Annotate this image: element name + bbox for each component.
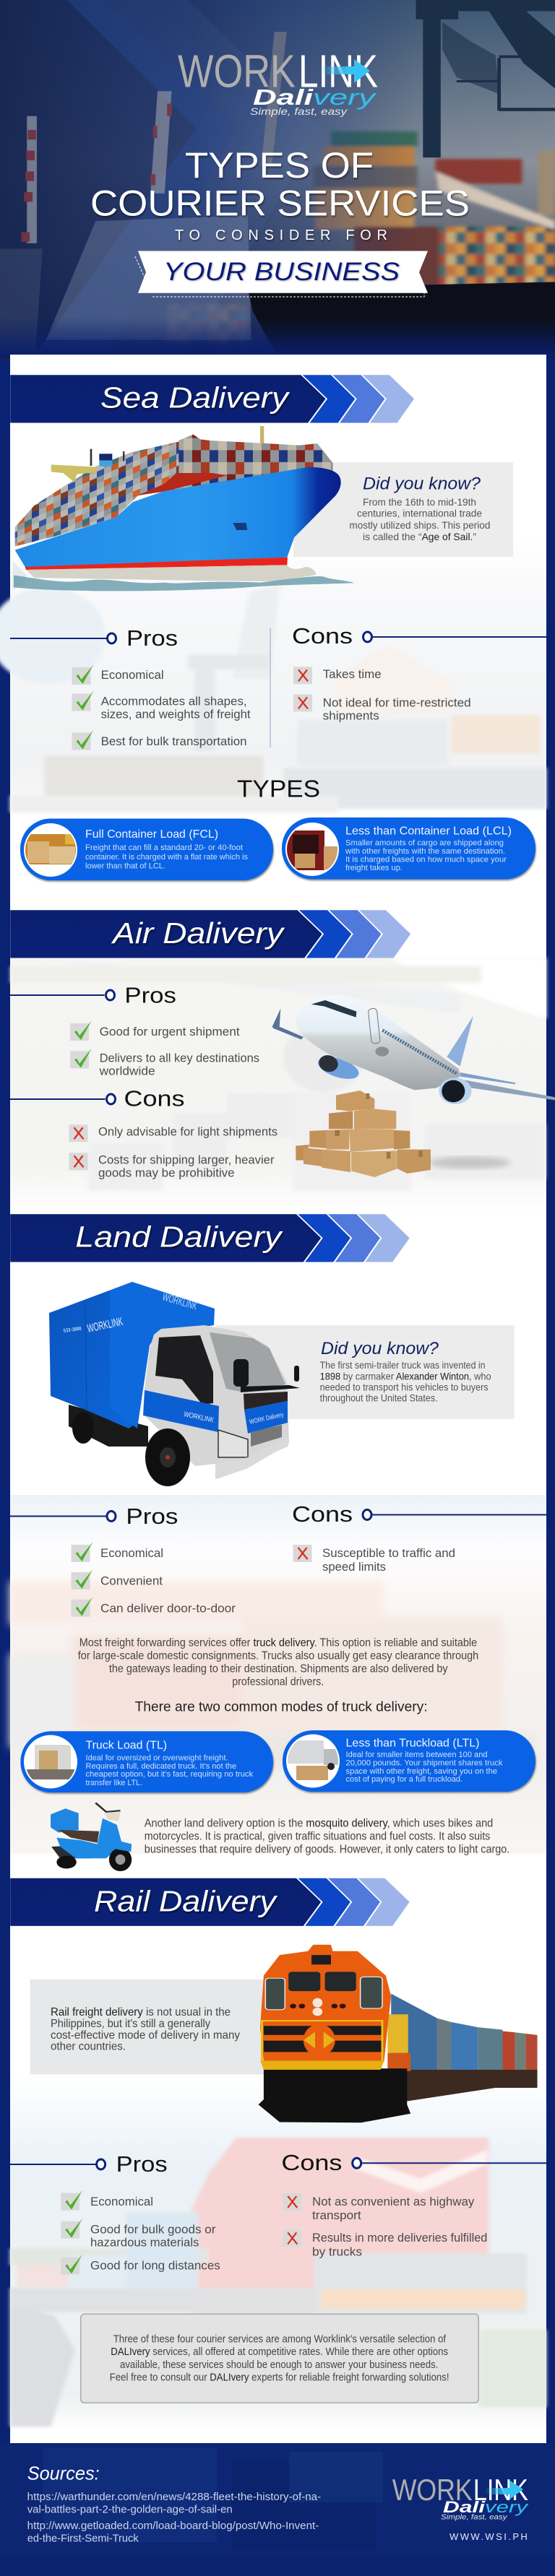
check icon [71,1597,92,1617]
rail pros list [61,2190,220,2274]
side walkway [387,2014,408,2053]
sources list: http://www.getloaded.com/load-board-blog/post/Who-Invent- [27,2520,319,2532]
title line 2: COURIER SERVICES [90,183,470,224]
logo arrow [485,2480,523,2499]
land section [10,1214,546,1871]
pill text: lower than that of LCL. [85,862,165,871]
pill text: cheapest option, but it's fast, requiring no truck [85,1770,254,1779]
front fender [111,1839,132,1852]
loco body [260,1945,391,2062]
sea pros heading [10,625,178,651]
connector [10,2164,96,2165]
callout text: available, these services should be enough to answer your business needs. [120,2359,438,2371]
truck delivery paragraph: professional drivers. [232,1675,324,1688]
air cons list [69,1124,278,1180]
water [14,576,355,591]
pill text: freight takes up. [345,864,403,872]
head lamp [218,1430,248,1457]
front logo: WORK Dalivery [249,1410,285,1426]
crane on deck [51,464,97,482]
windshield [210,1332,285,1392]
mirror [233,1359,300,1392]
box door edge [85,1304,87,1410]
pill title: Full Container Load (FCL) [85,828,218,841]
pill shape [283,1730,535,1792]
crane silhouettes [416,0,555,157]
pill text [345,838,507,872]
left engine [315,1052,361,1083]
check icon [71,1569,92,1590]
x icon [293,667,312,684]
delivery scooter [51,1803,132,1871]
logo word LINK: LINK [473,2473,528,2507]
ground shadow [429,1156,511,1169]
far wing [421,1075,555,1100]
logo word WORK: WORK [178,45,296,97]
lower frame [259,2068,410,2122]
logo tagline: Simple, fast, easy [250,105,348,117]
logo word Dali: Dali [443,2498,486,2516]
banner arrows [10,1878,410,1926]
front stripe [244,1401,288,1434]
item [312,2195,475,2222]
callout text: Feel free to consult our DALIvery experts for reliable freight forwarding solutions! [110,2372,449,2383]
sources list: ed-the-First-Semi-Truck [27,2533,139,2545]
pill text [85,844,248,871]
pill text: container. It is charged with a flat rate which is [85,853,248,862]
item: Best for bulk transportation [101,734,247,748]
box text: cost-effective mode of delivery in many [51,2029,240,2042]
website: WWW.WSI.PH [449,2531,528,2542]
check icon [72,729,94,750]
main title [90,145,470,243]
node [353,2158,361,2168]
body [56,1818,122,1858]
item: Accommodates all shapes, [101,694,247,708]
node [97,2159,106,2169]
land background photo [10,1495,546,1854]
railing [262,2021,382,2062]
chassis [69,1405,148,1447]
connector [10,638,106,639]
photo circle [24,823,77,877]
logo word LINK: LINK [298,45,378,97]
pill text [85,1753,254,1787]
item [90,2222,216,2249]
header [0,0,555,360]
check icon [72,691,94,711]
item: Results in more deliveries fulfilled [312,2231,487,2245]
faded port cranes [0,32,287,354]
item [99,1051,259,1077]
logo word Dali: Dali [253,84,314,110]
connector [10,1515,106,1517]
box text [51,2006,240,2052]
banner title: Air Dalivery [111,916,285,950]
door logo: WORKLINK [183,1410,215,1425]
ship hull [248,282,555,357]
banner title: Sea Dalivery [100,381,291,415]
label: Cons [292,623,353,649]
node [363,1509,371,1519]
pill text: It is charged based on how much space your [345,856,507,864]
item: hazardous materials [90,2236,199,2249]
pill text: cost of paying for a full truckload. [345,1775,462,1784]
item: Susceptible to traffic and [322,1546,455,1560]
phone number: 533-3888 [63,1327,82,1334]
sea background photo [0,538,546,816]
pill title: Less than Truckload (LTL) [345,1737,480,1749]
air background photo [10,958,546,1212]
box heading: Did you know? [363,474,481,494]
ribbon shape [138,251,428,293]
pill text: 20,000 pounds. Your shipment shares truck [345,1758,503,1767]
closing callout [81,2314,478,2403]
banner title: Land Dalivery [75,1220,283,1254]
blue chevrons [35,0,237,355]
rear wheel [72,1412,94,1444]
callout text: DALIvery services, all offered at competitive rates. While there are other options [111,2346,448,2358]
connector [10,1098,106,1100]
photo circle [24,1735,77,1788]
box heading: Did you know? [321,1339,439,1358]
freight train [259,1945,538,2122]
x icon [283,2229,301,2247]
item [98,1153,275,1180]
containers [15,441,184,547]
front wheel [145,1428,190,1486]
label: Cons [281,2150,342,2175]
rail cons heading [281,2150,547,2175]
red stripe [25,558,288,570]
air cons heading [10,1085,185,1111]
rail background photo [10,2074,546,2430]
air banner [10,910,410,958]
front grille [251,1425,282,1447]
item [312,2231,487,2259]
label: Pros [126,1504,178,1529]
right engine [439,1077,472,1104]
box text [349,496,490,542]
black stripes [264,2026,383,2035]
node [107,1094,116,1104]
node [107,1511,116,1521]
item [322,1546,455,1574]
photo circle [285,823,339,876]
white content panel [10,355,546,2443]
check icon [61,2219,82,2239]
item: goods may be prohibitive [98,1166,235,1180]
land cons list [293,1545,455,1574]
pill text: Requires a full, dedicated truck. It's not the [85,1762,236,1771]
banner title: Rail Dalivery [94,1884,278,1917]
item: sizes, and weights of freight [101,708,251,721]
check icon [70,1020,92,1041]
truck delivery paragraph: the gateways leading to their destination. Shipments are also delivered by [109,1662,448,1675]
truck delivery paragraph: Most freight forwarding services offer truck delivery. This option is reliable and suitable [79,1636,477,1649]
pill: truck load [20,1731,273,1792]
item: Not ideal for time-restricted [323,695,471,709]
cargo box side [49,1282,137,1428]
label: Cons [124,1085,185,1111]
funnel [90,449,124,467]
logo word very: very [313,84,378,110]
banner arrows [10,1214,410,1262]
item: Economical [90,2195,153,2208]
cockpit [311,1000,356,1018]
pill text: Ideal for oversized or overweight freight. [85,1753,228,1762]
title line 3: TO CONSIDER FOR [175,227,387,243]
cab windows [265,1972,382,2010]
box logo front: WORKLINK [161,1291,199,1312]
item: Economical [101,668,164,682]
cardboard boxes [296,1090,511,1177]
side window [155,1335,213,1405]
item: Costs for shipping larger, heavier [98,1153,275,1167]
top box [51,1808,79,1832]
logo arrow [320,59,370,83]
item: Good for long distances [90,2259,220,2272]
ribbon [135,251,428,297]
label: Cons [292,1501,353,1527]
air section [10,910,555,1212]
rail cons list [283,2193,487,2259]
x icon [293,694,312,711]
box text: Rail freight delivery is not usual in the [51,2006,231,2018]
item: Good for bulk goods or [90,2222,216,2236]
check icon [72,664,94,685]
sources list: val-battles-part-2-the-golden-age-of-sail-en [27,2504,233,2516]
seat [59,1830,99,1843]
callout text [110,2333,449,2383]
logo word very: very [485,2498,530,2516]
rail pros heading [10,2151,168,2177]
x icon [293,1545,312,1562]
box text: other countries. [51,2041,126,2052]
pill: less than truckload [283,1730,535,1792]
rail banner [10,1878,410,1926]
box text: mostly utilized ships. This period [349,519,490,531]
banner arrows [10,375,414,423]
land pros list [71,1542,236,1617]
box text: throughout the United States. [320,1392,438,1403]
pill text: Freight that can fill a standard 20- or 40-foot [85,844,243,852]
front wheel [109,1848,132,1871]
sources list [27,2491,321,2545]
box text: is called the “Age of Sail.” [363,531,476,542]
land cons heading [292,1501,546,1527]
rail intro box [30,1979,276,2074]
box background [30,1979,276,2074]
cab [145,1325,289,1479]
item: worldwide [99,1064,155,1077]
pill shape [20,819,273,880]
item: Good for urgent shipment [100,1025,240,1038]
label: Pros [126,625,178,651]
box text: From the 16th to mid-19th [363,496,476,508]
footer logo [392,2473,530,2542]
item: Takes time [323,667,382,681]
node [363,632,371,642]
truck delivery paragraph: for large-scale domestic consignments. Trucks also usually get easy clearance through [78,1649,478,1662]
airplane [272,994,555,1104]
rear wheel [56,1856,77,1868]
pill text: with other freights with the same destination. [345,847,505,856]
header background photo [0,0,555,360]
did you know box [293,462,513,557]
fuselage [296,994,460,1090]
pill shape [282,818,535,880]
check icon [61,2190,82,2211]
winglet and near wing [272,1009,304,1039]
mosquito delivery paragraph: Another land delivery option is the mosquito delivery, which uses bikes and [145,1817,493,1829]
emblem [304,2024,335,2056]
mosquito delivery paragraph [145,1817,509,1855]
item: Economical [100,1546,163,1560]
node [106,990,114,1000]
handlebar [95,1803,121,1812]
box logo side: WORKLINK [86,1316,124,1335]
truck delivery paragraph [78,1636,478,1688]
mosquito delivery paragraph: motorcycles. It is practical, given traffic situations and fuel costs. It also suits [145,1830,490,1843]
tail fin [447,1016,473,1067]
top vent [311,1955,331,1964]
box pile [296,1090,431,1177]
item: Convenient [100,1574,163,1587]
containers stack and port elements [166,131,555,343]
ribbon text: YOUR BUSINESS [163,258,400,286]
pill text: space with other freight, saving you on the [345,1767,497,1776]
container cars [391,1994,538,2070]
box text: needed to transport his vehicles to buyers [320,1381,489,1392]
pill text: transfer like LTL. [85,1779,142,1787]
ribbon dashes [135,256,424,297]
item: transport [312,2208,361,2222]
sea cons heading [292,623,547,649]
pill title: Truck Load (TL) [85,1739,167,1751]
logo [178,45,378,117]
water spray [12,561,27,590]
title line 1: TYPES OF [185,145,374,186]
x icon [69,1153,88,1170]
container ship [12,426,355,591]
callout box [81,2314,478,2403]
mosquito delivery paragraph: businesses that require delivery of goods. However, it only caters to light cargo. [145,1843,509,1855]
pill text [345,1751,503,1784]
bumper [215,1437,288,1479]
belly fairing [375,1046,389,1057]
passenger windows [382,1031,457,1074]
pill title: Less than Container Load (LCL) [345,825,512,837]
air pros heading [10,982,176,1008]
left dark overlay [0,0,457,360]
sources list: https://warthunder.com/en/news/4288-fleet-the-history-of-na- [27,2491,321,2503]
item: Only advisable for light shipments [98,1125,278,1139]
truck modes intro: There are two common modes of truck delivery: [135,1700,428,1715]
anchor mark [233,523,247,530]
sources heading: Sources: [27,2462,100,2484]
rail section [10,1878,547,2430]
label: Pros [124,982,176,1008]
connector [10,994,104,996]
box background [217,1325,515,1419]
pill: less than container load [282,818,535,880]
cargo box face [110,1282,215,1428]
pill shape [20,1731,273,1792]
connector [373,636,547,638]
box text: 1898 by carmaker Alexander Winton, who [320,1371,491,1382]
land pros heading [10,1504,178,1529]
box text: Philippines, but it's still a generally [51,2018,210,2030]
check icon [70,1049,92,1069]
door stripe [143,1390,219,1432]
banner arrows [10,910,410,958]
hull [15,467,341,568]
item: Delivers to all key destinations [100,1051,259,1064]
connector [372,1514,546,1515]
did you know box [217,1325,515,1419]
item: Can deliver door-to-door [100,1602,236,1616]
undercarriage [391,2068,538,2103]
x icon [69,1124,88,1142]
item: by trucks [312,2245,362,2259]
callout text: Three of these four courier services are among Worklink's versatile selection of [113,2333,447,2345]
pill text: Smaller amounts of cargo are shipped along [345,838,504,847]
logo word WORK: WORK [392,2473,473,2507]
box background [293,462,513,557]
item [101,694,251,721]
item [323,695,471,723]
footer background [0,2443,555,2576]
land banner [10,1214,410,1262]
isuzu band [244,1392,288,1410]
box text: centuries, international trade [357,508,482,519]
logo tagline: Simple, fast, easy [441,2513,508,2522]
air pros list [70,1020,259,1077]
mast [260,426,264,472]
footer [0,2443,555,2576]
item: speed limits [322,1560,386,1574]
box text [320,1359,491,1403]
pill: full container load [20,819,273,880]
engine and rear [51,1844,95,1858]
label: Pros [116,2151,168,2177]
types heading: TYPES [237,776,320,802]
x icon [283,2193,301,2211]
pill text: Ideal for smaller items between 100 and [345,1751,487,1759]
node [107,633,116,643]
connector [362,2162,547,2164]
sea banner [10,375,414,423]
check icon [61,2254,82,2274]
lower hull [26,565,316,581]
door [368,1008,380,1044]
photo circle [286,1735,340,1788]
lamps [290,1998,346,2016]
box text: The first semi-trailer truck was invented in [320,1359,486,1371]
yellow deck [260,2061,384,2070]
sea pros list [72,664,251,750]
sea section [0,375,547,880]
item: shipments [323,709,379,723]
check icon [71,1542,92,1562]
delivery truck [49,1282,300,1486]
sea cons list [293,667,471,723]
item: Not as convenient as highway [312,2195,475,2208]
